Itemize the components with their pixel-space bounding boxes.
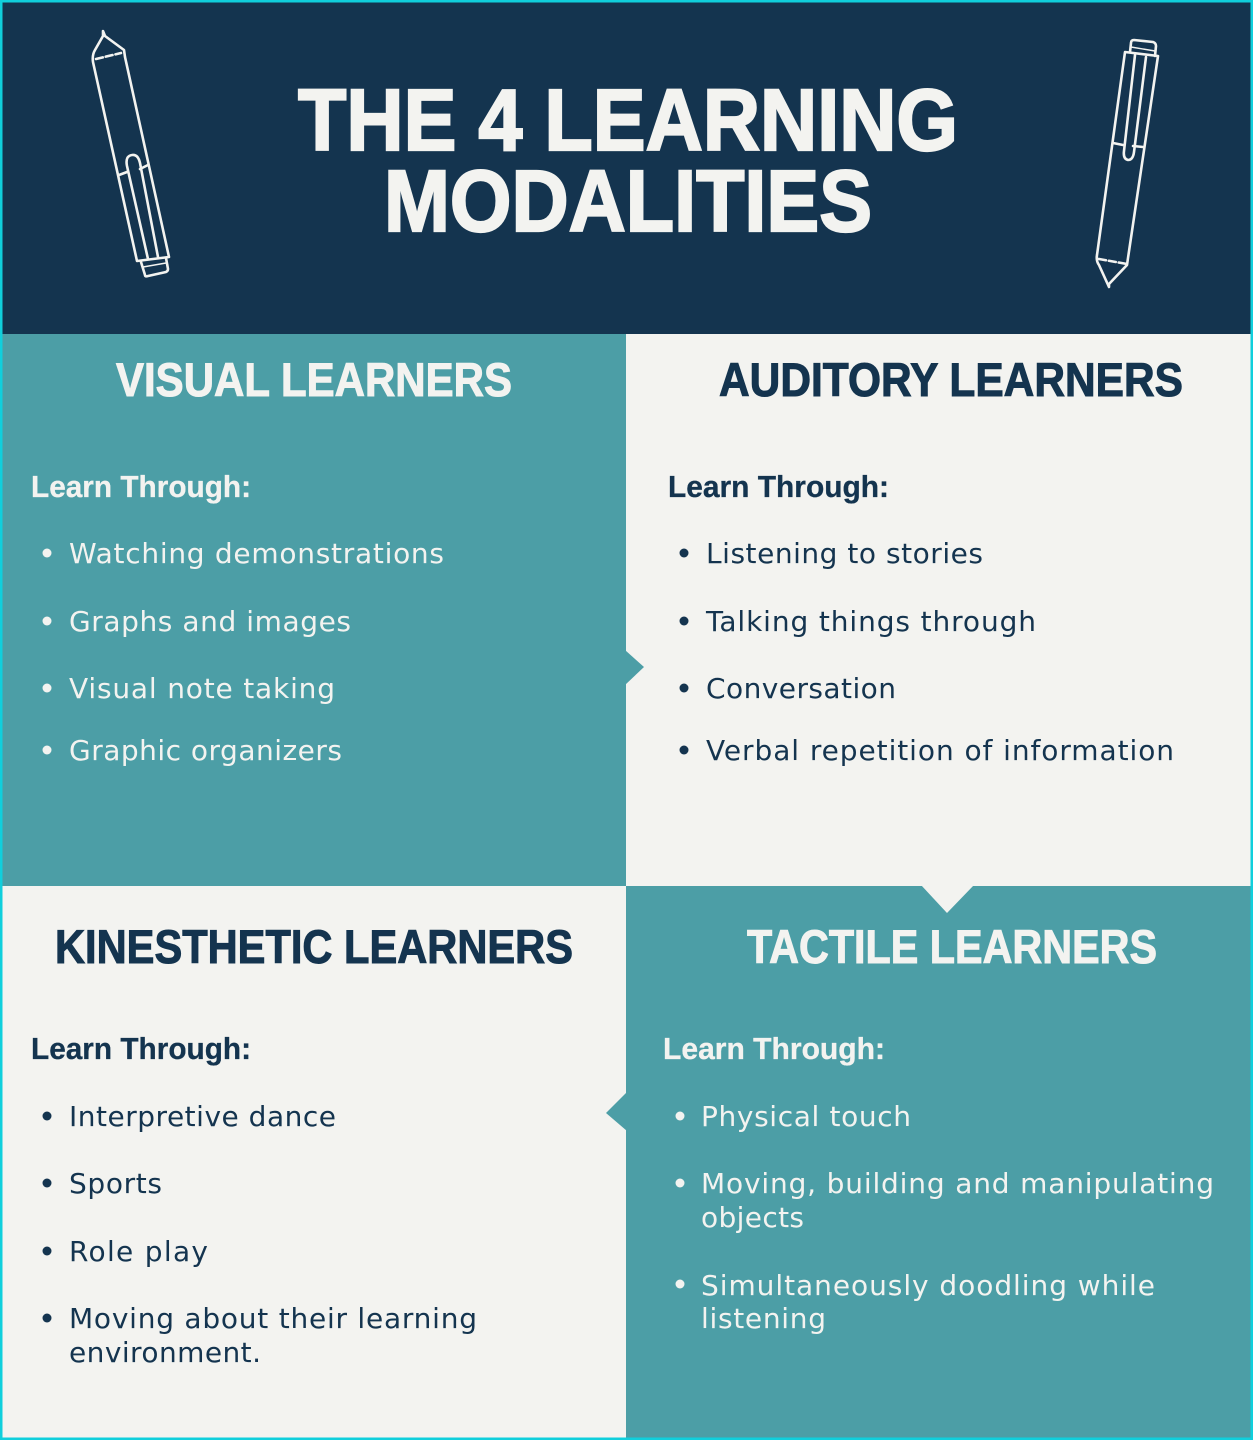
arrow: tactile to kinesthetic: [606, 1092, 627, 1131]
panel: tactile learners: [626, 886, 1253, 1440]
subheading: learn through: Learn Through:: [31, 469, 251, 504]
list: auditory methods: Verbal repetition of information: [706, 734, 1174, 767]
subheading: learn through: Learn Through:: [668, 469, 889, 504]
icon: right pen: [1097, 40, 1158, 287]
list: auditory methods: Conversation: [706, 672, 896, 705]
list: visual methods: [42, 537, 444, 767]
icon: left pen: [93, 31, 169, 276]
list: kinesthetic methods: Moving about their learning: [69, 1302, 477, 1335]
list: visual methods: Visual note taking: [69, 672, 335, 705]
heading: tactile learners: TACTILE LEARNERS: [747, 920, 1157, 973]
panel: auditory learners: [626, 334, 1253, 886]
title: MODALITIES: [384, 153, 872, 250]
heading: auditory learners: AUDITORY LEARNERS: [719, 353, 1183, 406]
list: tactile methods: Moving, building and manipulating: [701, 1167, 1214, 1200]
title: [298, 72, 958, 250]
list: kinesthetic methods: Role play: [69, 1235, 208, 1268]
panel: header: [0, 0, 1253, 334]
list: auditory methods: [680, 537, 1174, 767]
list: visual methods: Graphic organizers: [69, 734, 342, 767]
arrow: visual to auditory: [625, 650, 644, 685]
arrow: auditory to tactile: [921, 885, 974, 913]
list: kinesthetic methods: environment.: [69, 1336, 261, 1369]
list: tactile methods: listening: [701, 1302, 826, 1335]
list: visual methods: Graphs and images: [69, 605, 351, 638]
panel: visual learners: [0, 334, 626, 886]
list: tactile methods: [676, 1100, 1214, 1335]
list: tactile methods: Simultaneously doodling while: [701, 1269, 1155, 1302]
subheading: learn through: Learn Through:: [663, 1031, 885, 1066]
list: tactile methods: objects: [701, 1201, 804, 1234]
list: visual methods: Watching demonstrations: [69, 537, 444, 570]
subheading: learn through: Learn Through:: [31, 1031, 251, 1066]
heading: visual learners: VISUAL LEARNERS: [116, 353, 512, 406]
heading: kinesthetic learners: KINESTHETIC LEARNERS: [55, 920, 573, 973]
list: auditory methods: Listening to stories: [706, 537, 983, 570]
panel: kinesthetic learners: [0, 886, 626, 1440]
title: THE 4 LEARNING: [298, 72, 958, 169]
list: auditory methods: Talking things through: [705, 605, 1036, 638]
list: kinesthetic methods: Sports: [69, 1167, 162, 1200]
list: kinesthetic methods: [42, 1100, 477, 1369]
list: kinesthetic methods: Interpretive dance: [69, 1100, 336, 1133]
list: tactile methods: Physical touch: [701, 1100, 911, 1133]
